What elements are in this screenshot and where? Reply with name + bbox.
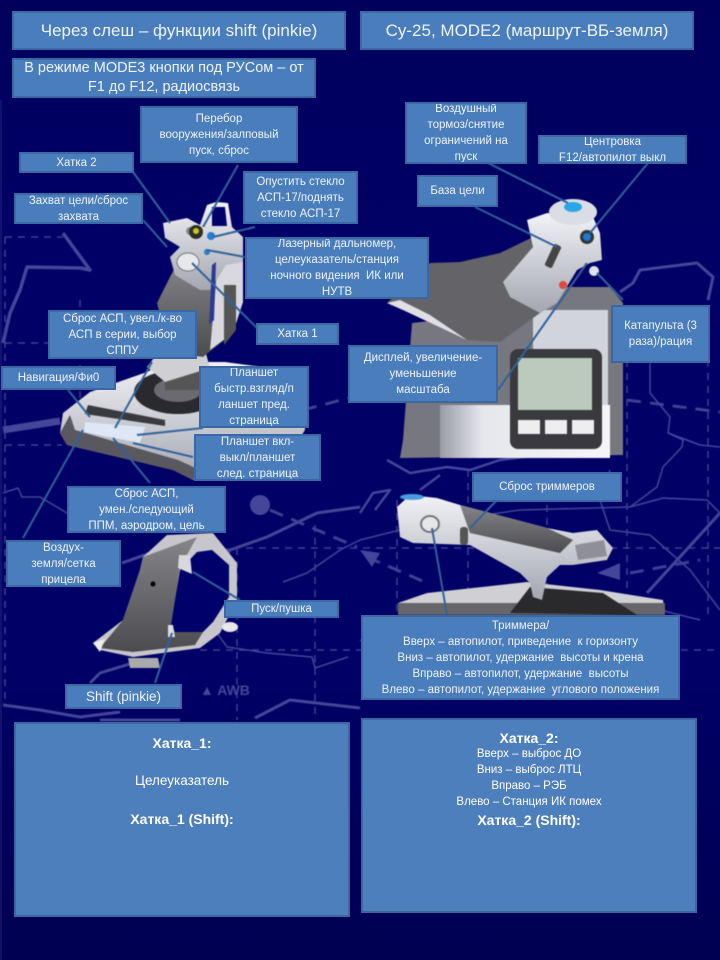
heading: shift note: [12, 11, 346, 50]
callout: shift: Shift (pinkie): [86, 688, 161, 704]
panel: hat 2: Вверх – выброс ДО: [477, 748, 581, 760]
callout: trim functions: Вверх – автопилот, приведение к горизонту: [403, 636, 638, 648]
callout: centering: [538, 135, 687, 164]
callout: centering: F12/автопилот выкл: [559, 152, 666, 164]
callout: tablet quick view: быстр.взгляд/п: [214, 383, 294, 395]
right throttle with display: [387, 199, 623, 458]
heading: aircraft and mode: [360, 11, 694, 50]
callout: fire: Пуск/пушка: [251, 603, 312, 615]
callout: navigation: [1, 366, 116, 390]
callout: air brake: тормоз/снятие: [428, 119, 504, 131]
callout: hat 2: [19, 152, 134, 173]
panel: hat 2: [361, 718, 697, 913]
panel: hat 2: Влево – Станция ИК помех: [456, 796, 602, 808]
left joystick side view: [93, 533, 238, 668]
callout: laser rangefinder: НУТВ: [322, 286, 352, 298]
callout: air-ground: [6, 540, 121, 587]
callout: tablet on/off: Планшет вкл-: [221, 436, 294, 448]
callout: display: Дисплей, увеличение-: [364, 352, 482, 364]
callout: ASP-17 glass: Опустить стекло: [256, 176, 345, 188]
callout: air-ground: земля/сетка: [31, 558, 96, 570]
panel: hat 1: Хатка_1 (Shift):: [130, 811, 234, 827]
callout: hat 1: Хатка 1: [277, 328, 318, 340]
callout: display: [348, 345, 498, 403]
note: mode 3: F1 до F12, радиосвязь: [88, 79, 240, 95]
callout: trim functions: Триммера/: [492, 620, 549, 632]
callout: weapon selection: вооружения/залповый: [159, 128, 278, 140]
callout: air brake: Воздушный: [435, 103, 497, 115]
callout: trim functions: Вниз – автопилот, удержание высоты и крена: [397, 652, 644, 664]
panel: hat 1: Целеуказатель: [135, 773, 229, 788]
callout: tablet on/off: след. страница: [217, 468, 298, 480]
callout: tablet quick view: Планшет: [230, 367, 278, 379]
callout: reset ASP, increase: СППУ: [106, 344, 139, 356]
panel: hat 2: Вниз – выброс ЛТЦ: [477, 764, 581, 776]
callout: tablet quick view: ланшет пред.: [218, 399, 290, 411]
callout: reset ASP, increase: Сброс АСП, увел./к-во: [63, 312, 182, 324]
callout: weapon selection: [140, 106, 298, 163]
callout: reset ASP, decrease: ППМ, аэродром, цель: [88, 520, 205, 532]
callout: weapon selection: пуск, сброс: [189, 144, 249, 156]
callout: trim functions: [361, 615, 680, 700]
left joystick top view: [60, 202, 305, 480]
heading: shift note: Через слеш – функции shift (pinkie): [41, 20, 317, 40]
callout: tablet quick view: [199, 366, 309, 428]
callout: air brake: пуск: [455, 151, 477, 163]
callout: target base: [417, 175, 498, 207]
callout: hat 1: [256, 323, 339, 345]
callout: reset ASP, increase: АСП в серии, выбор: [68, 328, 177, 340]
callout: ASP-17 glass: стекло АСП-17: [261, 208, 340, 220]
callout: target lock: [14, 193, 143, 224]
callout: ejection: раза)/рация: [629, 336, 692, 348]
callout: laser rangefinder: Лазерный дальномер,: [278, 238, 396, 250]
callout: target lock: Захват цели/сброс: [29, 194, 128, 206]
callout: ejection: [611, 305, 710, 363]
callout: trim reset: [472, 472, 622, 502]
callout: ASP-17 glass: [243, 171, 358, 224]
callout: centering: Центровка: [584, 136, 641, 148]
callout: trim functions: Вправо – автопилот, удержание высоты: [412, 668, 629, 680]
callout: trim functions: Влево – автопилот, удержание углового положения: [382, 684, 659, 696]
callout: ASP-17 glass: АСП-17/поднять: [257, 192, 344, 204]
callout: navigation: Навигация/Фи0: [18, 372, 99, 384]
callout: weapon selection: Перебор: [196, 112, 242, 124]
callout: target base: База цели: [430, 185, 485, 197]
callout: tablet on/off: выкл/планшет: [220, 452, 295, 464]
callout: tablet on/off: [194, 434, 321, 481]
note: mode 3: В режиме MODE3 кнопки под РУСом – от: [24, 60, 304, 76]
right throttle side view: [397, 494, 665, 615]
panel: hat 2: Хатка_2:: [499, 730, 558, 746]
callout: display: уменьшение: [389, 368, 457, 380]
callout: shift: [65, 684, 182, 709]
callout: air brake: [405, 102, 527, 164]
callout: air brake: ограничений на: [424, 135, 508, 147]
panel: hat 2: Хатка_2 (Shift):: [477, 812, 581, 828]
callout: target lock: захвата: [58, 210, 99, 222]
map markers: [200, 495, 620, 698]
map dashed lines: [5, 237, 720, 720]
callout: laser rangefinder: [245, 237, 429, 299]
callout: reset ASP, increase: [48, 310, 197, 359]
callout: reset ASP, decrease: [67, 486, 226, 533]
map markers: ▲ AWB: [200, 682, 250, 698]
callout: trim reset: Сброс триммеров: [499, 481, 595, 493]
note: mode 3: [12, 58, 316, 98]
callout: reset ASP, decrease: умен./следующий: [99, 504, 194, 516]
callout: hat 2: Хатка 2: [56, 156, 97, 168]
callout: fire: [224, 600, 339, 618]
callout: ejection: Катапульта (3: [624, 320, 697, 332]
callout: laser rangefinder: целеуказатель/станция: [275, 254, 399, 266]
callout: laser rangefinder: ночного видения ИК или: [270, 270, 404, 282]
connector lines: [23, 163, 648, 683]
panel: hat 1: Хатка_1:: [152, 735, 212, 751]
callout: tablet quick view: страница: [229, 415, 279, 427]
panel: hat 2: Вправо – РЭБ: [491, 780, 567, 792]
callout: air-ground: Воздух-: [43, 542, 84, 554]
panel: hat 1: [14, 722, 350, 917]
callout: reset ASP, decrease: Сброс АСП,: [115, 488, 178, 500]
callout: display: масштаба: [396, 384, 450, 396]
heading: aircraft and mode: Су-25, MODE2 (маршрут-ВБ-земля): [386, 20, 668, 40]
callout: air-ground: прицела: [41, 574, 86, 586]
